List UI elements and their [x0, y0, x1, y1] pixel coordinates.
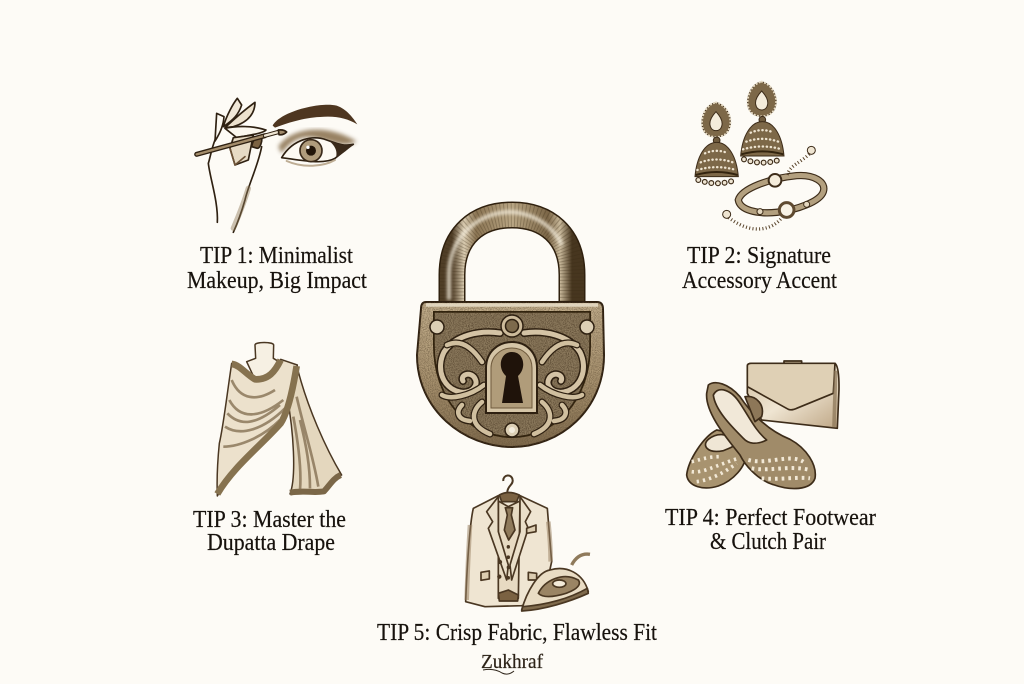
label: tip 1: Makeup, Big Impact [187, 268, 367, 294]
icon: vintage padlock [415, 212, 607, 450]
scroll ornament right [524, 332, 583, 434]
pockets and buttons [481, 525, 537, 580]
label: tip 2: Accessory Accent [682, 268, 837, 294]
eye shadow [278, 130, 357, 153]
front cloth [217, 359, 297, 496]
right hem band [290, 475, 341, 493]
makeup brush [197, 130, 287, 154]
right shoe [707, 383, 815, 489]
scroll ornament left [441, 332, 500, 434]
brand logo: Zukhraf: Zukhraf [481, 651, 543, 673]
necktie [504, 508, 515, 540]
tip 1: minimalist makeup [187, 98, 367, 294]
icon: suit on hanger with iron [466, 475, 590, 611]
fold shading [223, 380, 318, 490]
icon: jhumka earrings and bracelet [695, 82, 824, 229]
keyhole plate and keyhole [486, 342, 537, 413]
tip 3: dupatta drape [193, 342, 346, 556]
iron [522, 554, 590, 611]
label: tip 2 [682, 243, 837, 294]
label: tip 3 [193, 507, 346, 556]
label: tip 4: TIP 4: Perfect Footwear [665, 505, 876, 531]
eyebrow [273, 105, 357, 128]
rivets [430, 320, 594, 437]
lapels [487, 497, 508, 580]
hanger hook [503, 475, 513, 492]
mannequin neck [247, 342, 282, 387]
left shoe [687, 430, 746, 488]
label: tip 2: TIP 2: Signature [687, 243, 831, 269]
tip 4: footwear and clutch [665, 361, 876, 555]
label: tip 4 [665, 505, 876, 555]
back panel [287, 365, 342, 494]
bracelet [723, 146, 824, 229]
label: tip 5: TIP 5: Crisp Fabric, Flawless Fit [377, 620, 657, 646]
label: tip 3: Dupatta Drape [207, 530, 335, 556]
top ring ornament [501, 315, 523, 337]
icon: draped dupatta on mannequin [217, 342, 342, 496]
border bands [217, 360, 297, 494]
label: tip 4: & Clutch Pair [710, 529, 826, 555]
jacket [466, 496, 552, 607]
shirt and vest [498, 501, 520, 598]
clutch [747, 361, 839, 428]
right earring [741, 82, 784, 163]
tip 2: signature accessory [682, 82, 837, 294]
collar interior [499, 492, 519, 502]
icon: juttis and clutch [687, 361, 839, 489]
icon: hand with brush and eye [197, 98, 357, 232]
label: tip 1 [187, 243, 367, 294]
label: tip 3: TIP 3: Master the [193, 507, 346, 533]
hand [208, 98, 266, 232]
left earring [695, 102, 738, 183]
label: tip 1: TIP 1: Minimalist [200, 243, 353, 269]
tip 5: crisp fabric [377, 475, 657, 646]
padlock shackle [449, 212, 572, 306]
padlock body [417, 302, 604, 447]
eye [282, 138, 354, 166]
